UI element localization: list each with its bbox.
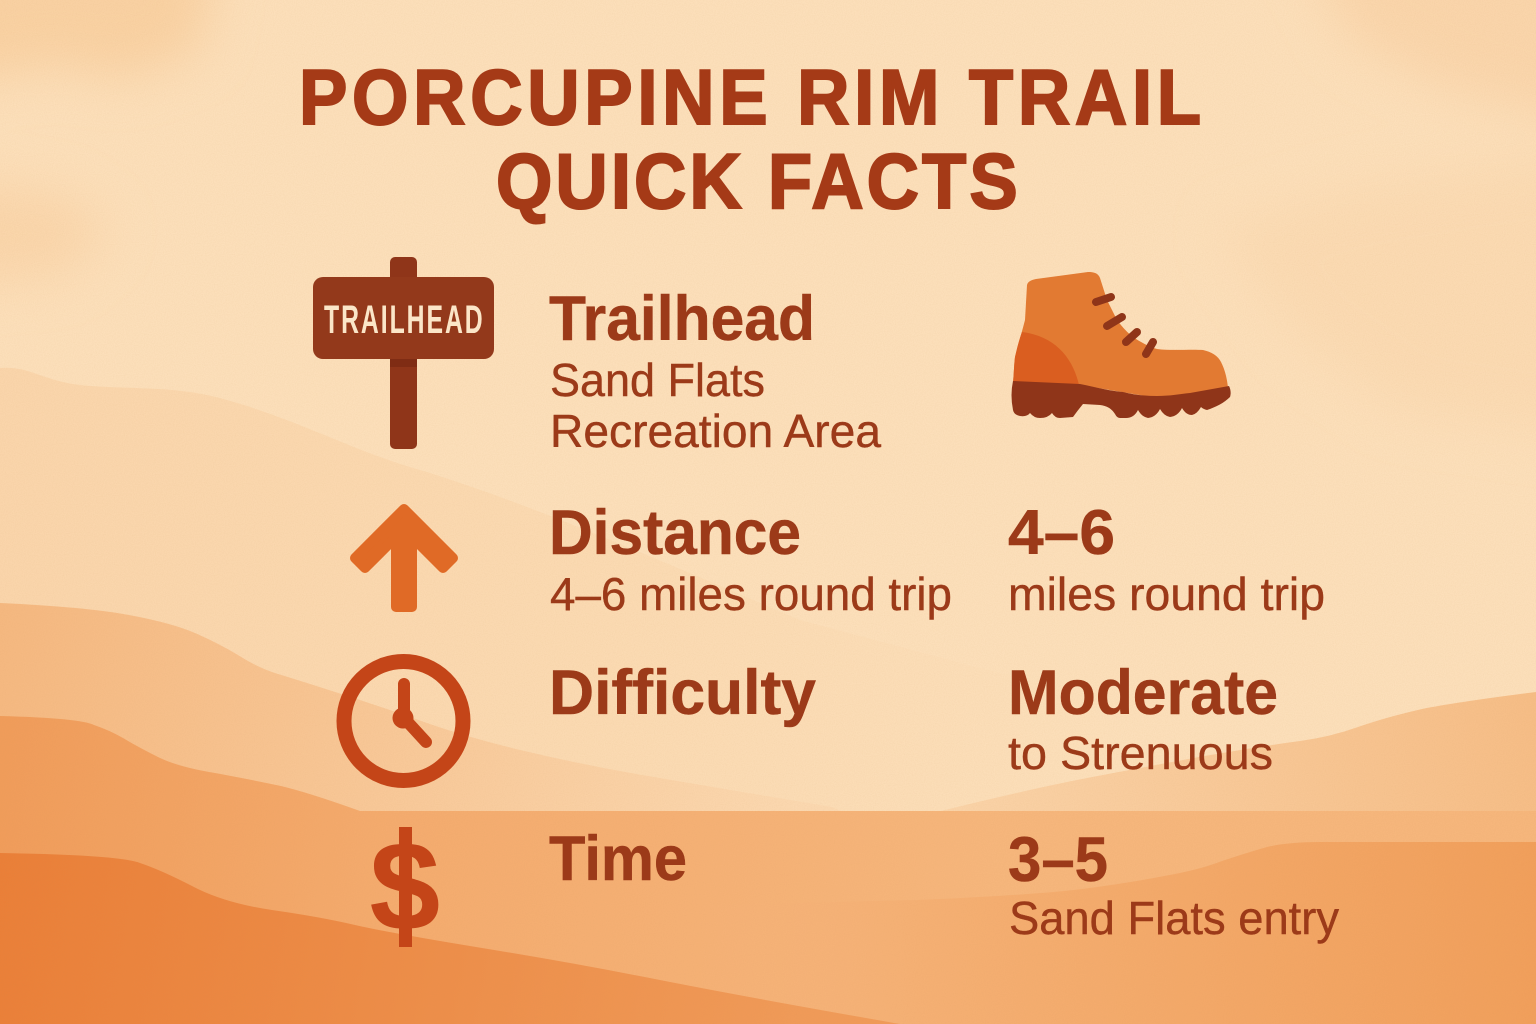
row: trailhead: Sand Flats	[550, 354, 765, 406]
icon: hiking boot	[1012, 272, 1231, 418]
icon: trailhead sign	[313, 257, 494, 449]
row: distance	[549, 498, 952, 620]
icon: up arrow	[355, 509, 453, 607]
row: trailhead: Trailhead	[549, 284, 815, 354]
row: distance: 4–6 miles round trip	[550, 568, 952, 620]
icon: dollar sign: $	[370, 815, 440, 957]
time value: 3–5	[1008, 825, 1108, 895]
difficulty value: to Strenuous	[1008, 727, 1273, 779]
title: QUICK FACTS	[496, 138, 1018, 225]
row: distance: Distance	[549, 498, 801, 568]
icon: trailhead sign: TRAILHEAD	[324, 298, 483, 343]
row: time: Time	[549, 824, 687, 894]
distance value: miles round trip	[1008, 568, 1325, 620]
distance value: 4–6	[1008, 498, 1115, 568]
difficulty value	[1008, 658, 1278, 779]
time value	[1008, 825, 1339, 944]
time value: Sand Flats entry	[1009, 892, 1339, 944]
row: difficulty: Difficulty	[549, 658, 816, 728]
icon: clock	[344, 662, 463, 780]
row: trailhead: Recreation Area	[550, 405, 881, 457]
title	[299, 54, 1201, 225]
difficulty value: Moderate	[1008, 658, 1278, 728]
title: PORCUPINE RIM TRAIL	[299, 54, 1201, 141]
row: trailhead	[549, 284, 881, 457]
distance value	[1008, 498, 1325, 620]
